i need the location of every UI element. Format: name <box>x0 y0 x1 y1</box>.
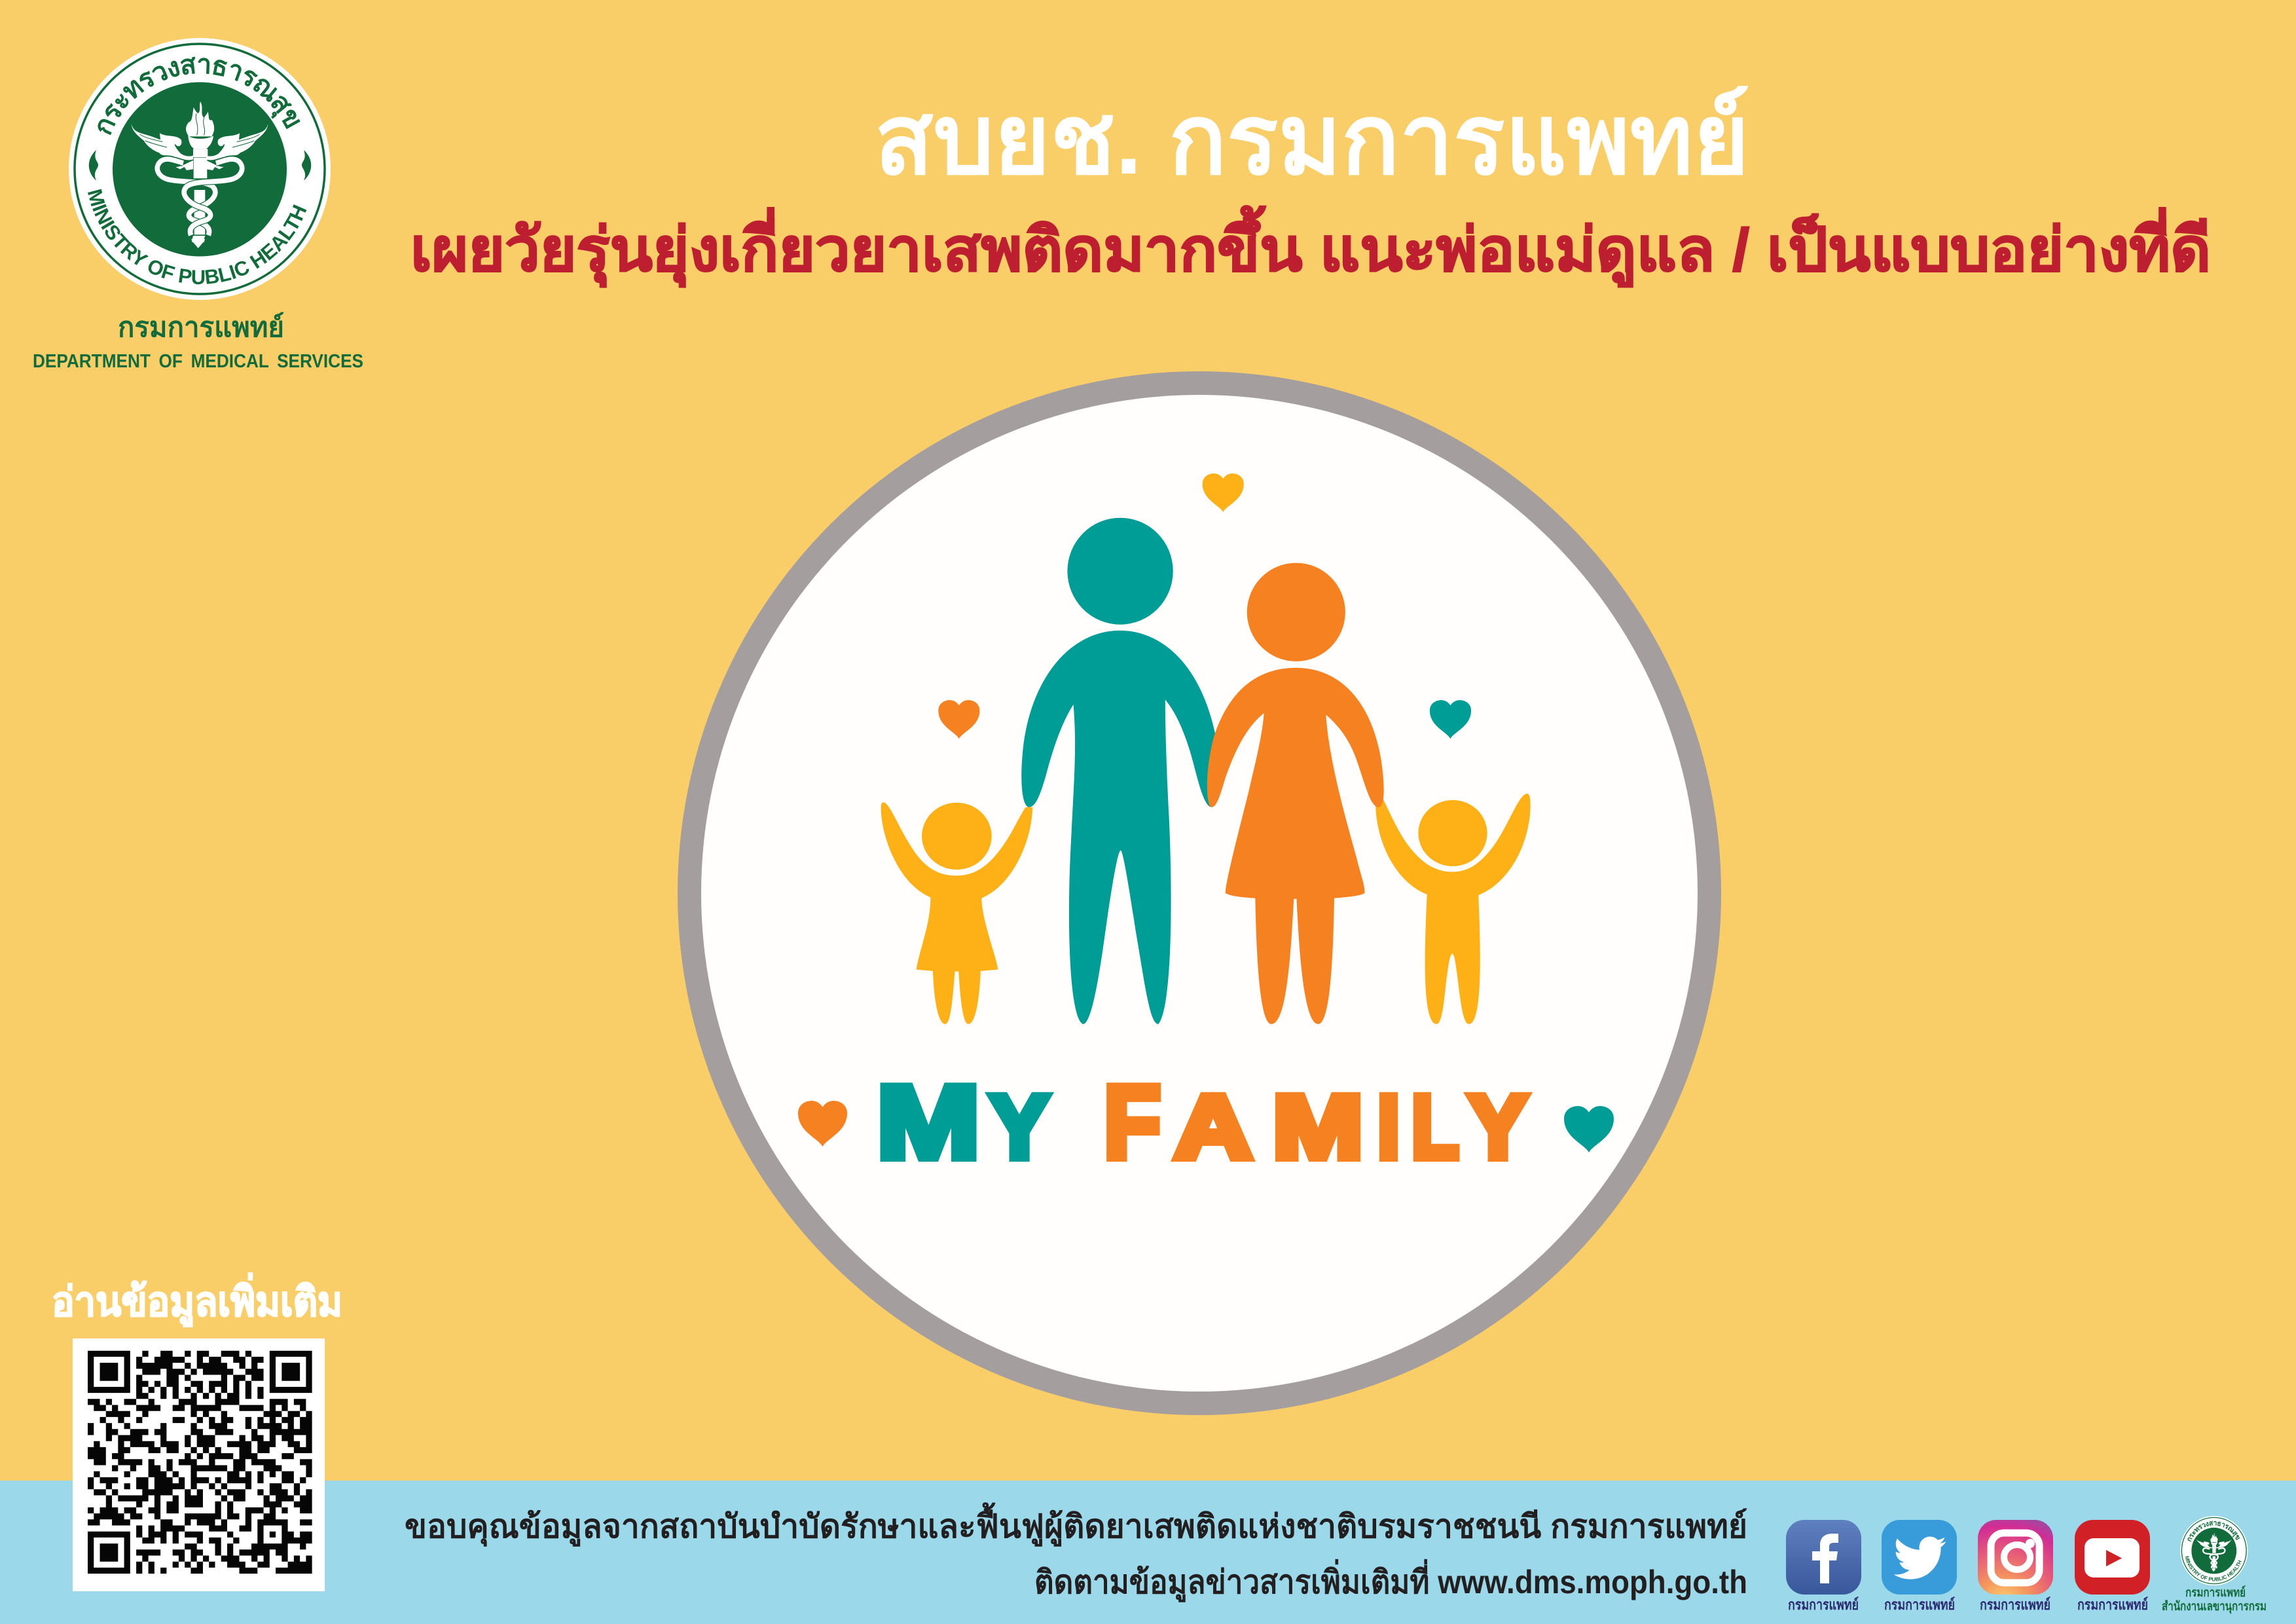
My Family wordmark: M <box>877 1065 980 1180</box>
My Family wordmark <box>877 1065 1527 1180</box>
website line: ติดตามข้อมูลข่าวสารเพิ่มเติมที่ www.dms.moph.go.th <box>1034 1559 1747 1602</box>
subtitle: เผยวัยรุ่นยุ่งเกี่ยวยาเสพติดมากขึ้น แนะพ่อแม่ดูแล / เป็นแบบอย่างที่ดี <box>410 206 2211 287</box>
department name Thai: กรมการแพทย์ <box>118 312 284 342</box>
logo: Ministry of Public Health seal: MINISTRY OF PUBLIC HEALTH <box>88 189 306 284</box>
My Family wordmark: A <box>1175 1077 1252 1177</box>
icon: teal heart <box>1564 1106 1614 1153</box>
icon: facebook <box>1786 1520 1861 1595</box>
logo: Ministry of Public Health seal <box>69 38 331 300</box>
My Family wordmark: Y <box>1468 1077 1527 1177</box>
logo: Ministry of Public Health seal: กระทรวงสาธารณสุข <box>98 56 301 135</box>
My Family wordmark: I <box>1377 1077 1400 1177</box>
QR heading: อ่านข้อมูลเพิ่มเติม <box>52 1273 342 1327</box>
icon: youtube <box>2075 1520 2150 1595</box>
social label: twitter: กรมการแพทย์ <box>1884 1596 1955 1613</box>
seal label: department: กรมการแพทย์ <box>2185 1585 2246 1600</box>
My Family wordmark: M <box>1273 1077 1363 1177</box>
department name English: DEPARTMENT OF MEDICAL SERVICES <box>33 351 363 372</box>
icon: twitter <box>1882 1520 1957 1595</box>
My Family wordmark: F <box>1104 1065 1161 1180</box>
social label: facebook: กรมการแพทย์ <box>1788 1596 1859 1613</box>
credit line: ขอบคุณข้อมูลจากสถาบันบำบัดรักษาและฟื้นฟูผู้ติดยาเสพติดแห่งชาติบรมราชชนนี กรมการแพทย์ <box>405 1502 1747 1547</box>
icon: instagram <box>1978 1520 2053 1595</box>
logo: small ministry seal <box>2180 1516 2248 1585</box>
seal label: secretary office: สำนักงานเลขานุการกรม <box>2162 1600 2267 1614</box>
social label: youtube: กรมการแพทย์ <box>2077 1596 2148 1613</box>
panel: family logo circle <box>678 371 1721 1415</box>
family illustration <box>881 473 1531 1024</box>
My Family wordmark: L <box>1412 1077 1459 1177</box>
footer band <box>0 1481 2296 1624</box>
title: สบยช. กรมการแพทย์ <box>875 84 1749 194</box>
logo: small ministry seal: กระทรวงสาธารณสุข <box>2187 1521 2240 1541</box>
QR code <box>73 1338 325 1591</box>
logo: small ministry seal: MINISTRY OF PUBLIC HEALTH <box>2185 1556 2242 1581</box>
My Family wordmark: Y <box>990 1077 1049 1177</box>
icon: orange heart <box>798 1101 847 1147</box>
social label: instagram: กรมการแพทย์ <box>1980 1596 2050 1613</box>
